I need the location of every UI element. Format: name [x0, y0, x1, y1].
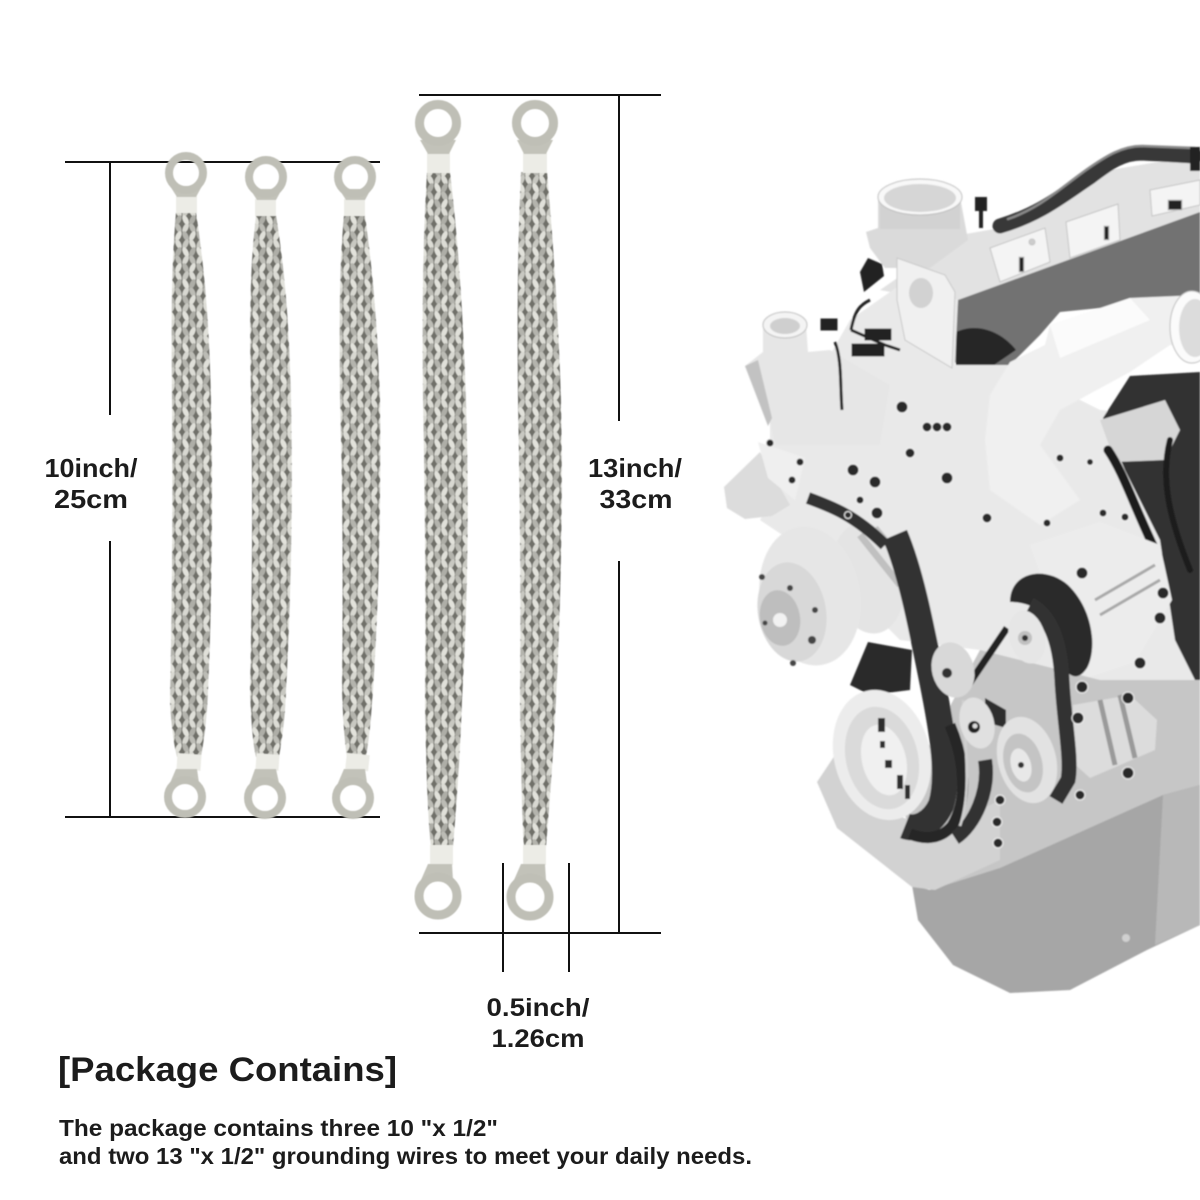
- label: 13 inch: 13inch/: [588, 453, 682, 483]
- dimension lines: strap width: [503, 863, 569, 972]
- heading: [Package Contains]: [58, 1051, 397, 1089]
- label: strap width: 1.26cm: [492, 1025, 584, 1053]
- strap 4 (13 inch): [419, 104, 468, 915]
- engine: block main casting: [760, 285, 1200, 700]
- engine: hose clamp: [1190, 147, 1200, 171]
- engine: fan hub: [757, 534, 858, 667]
- label: 13 inch: 33cm: [600, 484, 672, 514]
- label: 10 inch: 25cm: [54, 484, 128, 514]
- engine: elbow mouth: [1170, 291, 1200, 363]
- engine: lower casting: [900, 650, 1200, 890]
- description text: [59, 1115, 752, 1169]
- engine: vertical belt: [1030, 605, 1069, 800]
- label: strap width: 0.5inch/: [486, 994, 590, 1022]
- engine: lower alternator: [1070, 695, 1157, 778]
- engine: oil pan drain: [1122, 934, 1130, 942]
- engine: dark harness area: [1103, 372, 1200, 690]
- engine: charge-air elbow pipe: [1008, 294, 1180, 399]
- label: 10 inch: [44, 453, 138, 514]
- engine: thick hoses: [1108, 440, 1190, 570]
- engine: upper manifold: [880, 155, 1200, 305]
- engine: harness wires: [822, 300, 900, 410]
- engine: thermostat housing: [744, 310, 832, 426]
- engine: tensioner dark belt: [850, 642, 912, 695]
- engine: crank pulley: [832, 688, 932, 820]
- engine: manifold brackets: [990, 180, 1200, 282]
- engine: idler pulleys: [925, 606, 1051, 753]
- dimension lines: 13 inch: [419, 95, 661, 933]
- engine: lower alternator ribs: [1100, 695, 1135, 765]
- engine: accessory pulley: [988, 710, 1066, 810]
- engine: oil pan right panel: [1155, 785, 1200, 945]
- engine: oil pan: [912, 785, 1200, 993]
- description text: The package contains three 10 "x 1/2": [59, 1115, 498, 1141]
- engine: alternator ribs: [1095, 565, 1160, 615]
- label: 13 inch: [588, 453, 682, 514]
- engine: sensor connector: [860, 197, 987, 292]
- engine: alternator belt loop: [1010, 574, 1092, 676]
- engine illustration: [724, 146, 1200, 993]
- engine: alternator body: [1144, 538, 1174, 604]
- engine: oil filter: [724, 442, 789, 520]
- engine: bracket boss: [909, 278, 933, 308]
- engine: front cover plate: [817, 755, 1000, 890]
- engine: thin belt: [967, 628, 1007, 687]
- engine: valve cover band: [953, 212, 1200, 376]
- engine: bolts: [766, 401, 1169, 848]
- engine: turbo fitting: [1100, 400, 1180, 462]
- label: 10 inch: 10inch/: [44, 453, 138, 483]
- engine: upper pulley belt: [808, 498, 885, 545]
- strap 3 (10 inch): [336, 160, 380, 815]
- engine: dark recess: [955, 328, 1016, 366]
- engine: throttle inlet tube: [866, 179, 968, 268]
- engine: main drive belts: [895, 535, 986, 838]
- strap 2 (10 inch): [248, 160, 292, 815]
- dimension lines: 10 inch: [65, 162, 380, 817]
- label: strap width: [486, 994, 590, 1053]
- engine: front bracket: [897, 258, 955, 368]
- description text: and two 13 "x 1/2" grounding wires to meet your daily needs.: [59, 1143, 752, 1169]
- engine: fan drive pulley: [857, 526, 899, 634]
- engine: elbow top: [1050, 298, 1150, 358]
- strap 5 (13 inch): [511, 104, 562, 916]
- strap 1 (10 inch): [168, 156, 212, 814]
- engine: rear hose: [1000, 146, 1195, 226]
